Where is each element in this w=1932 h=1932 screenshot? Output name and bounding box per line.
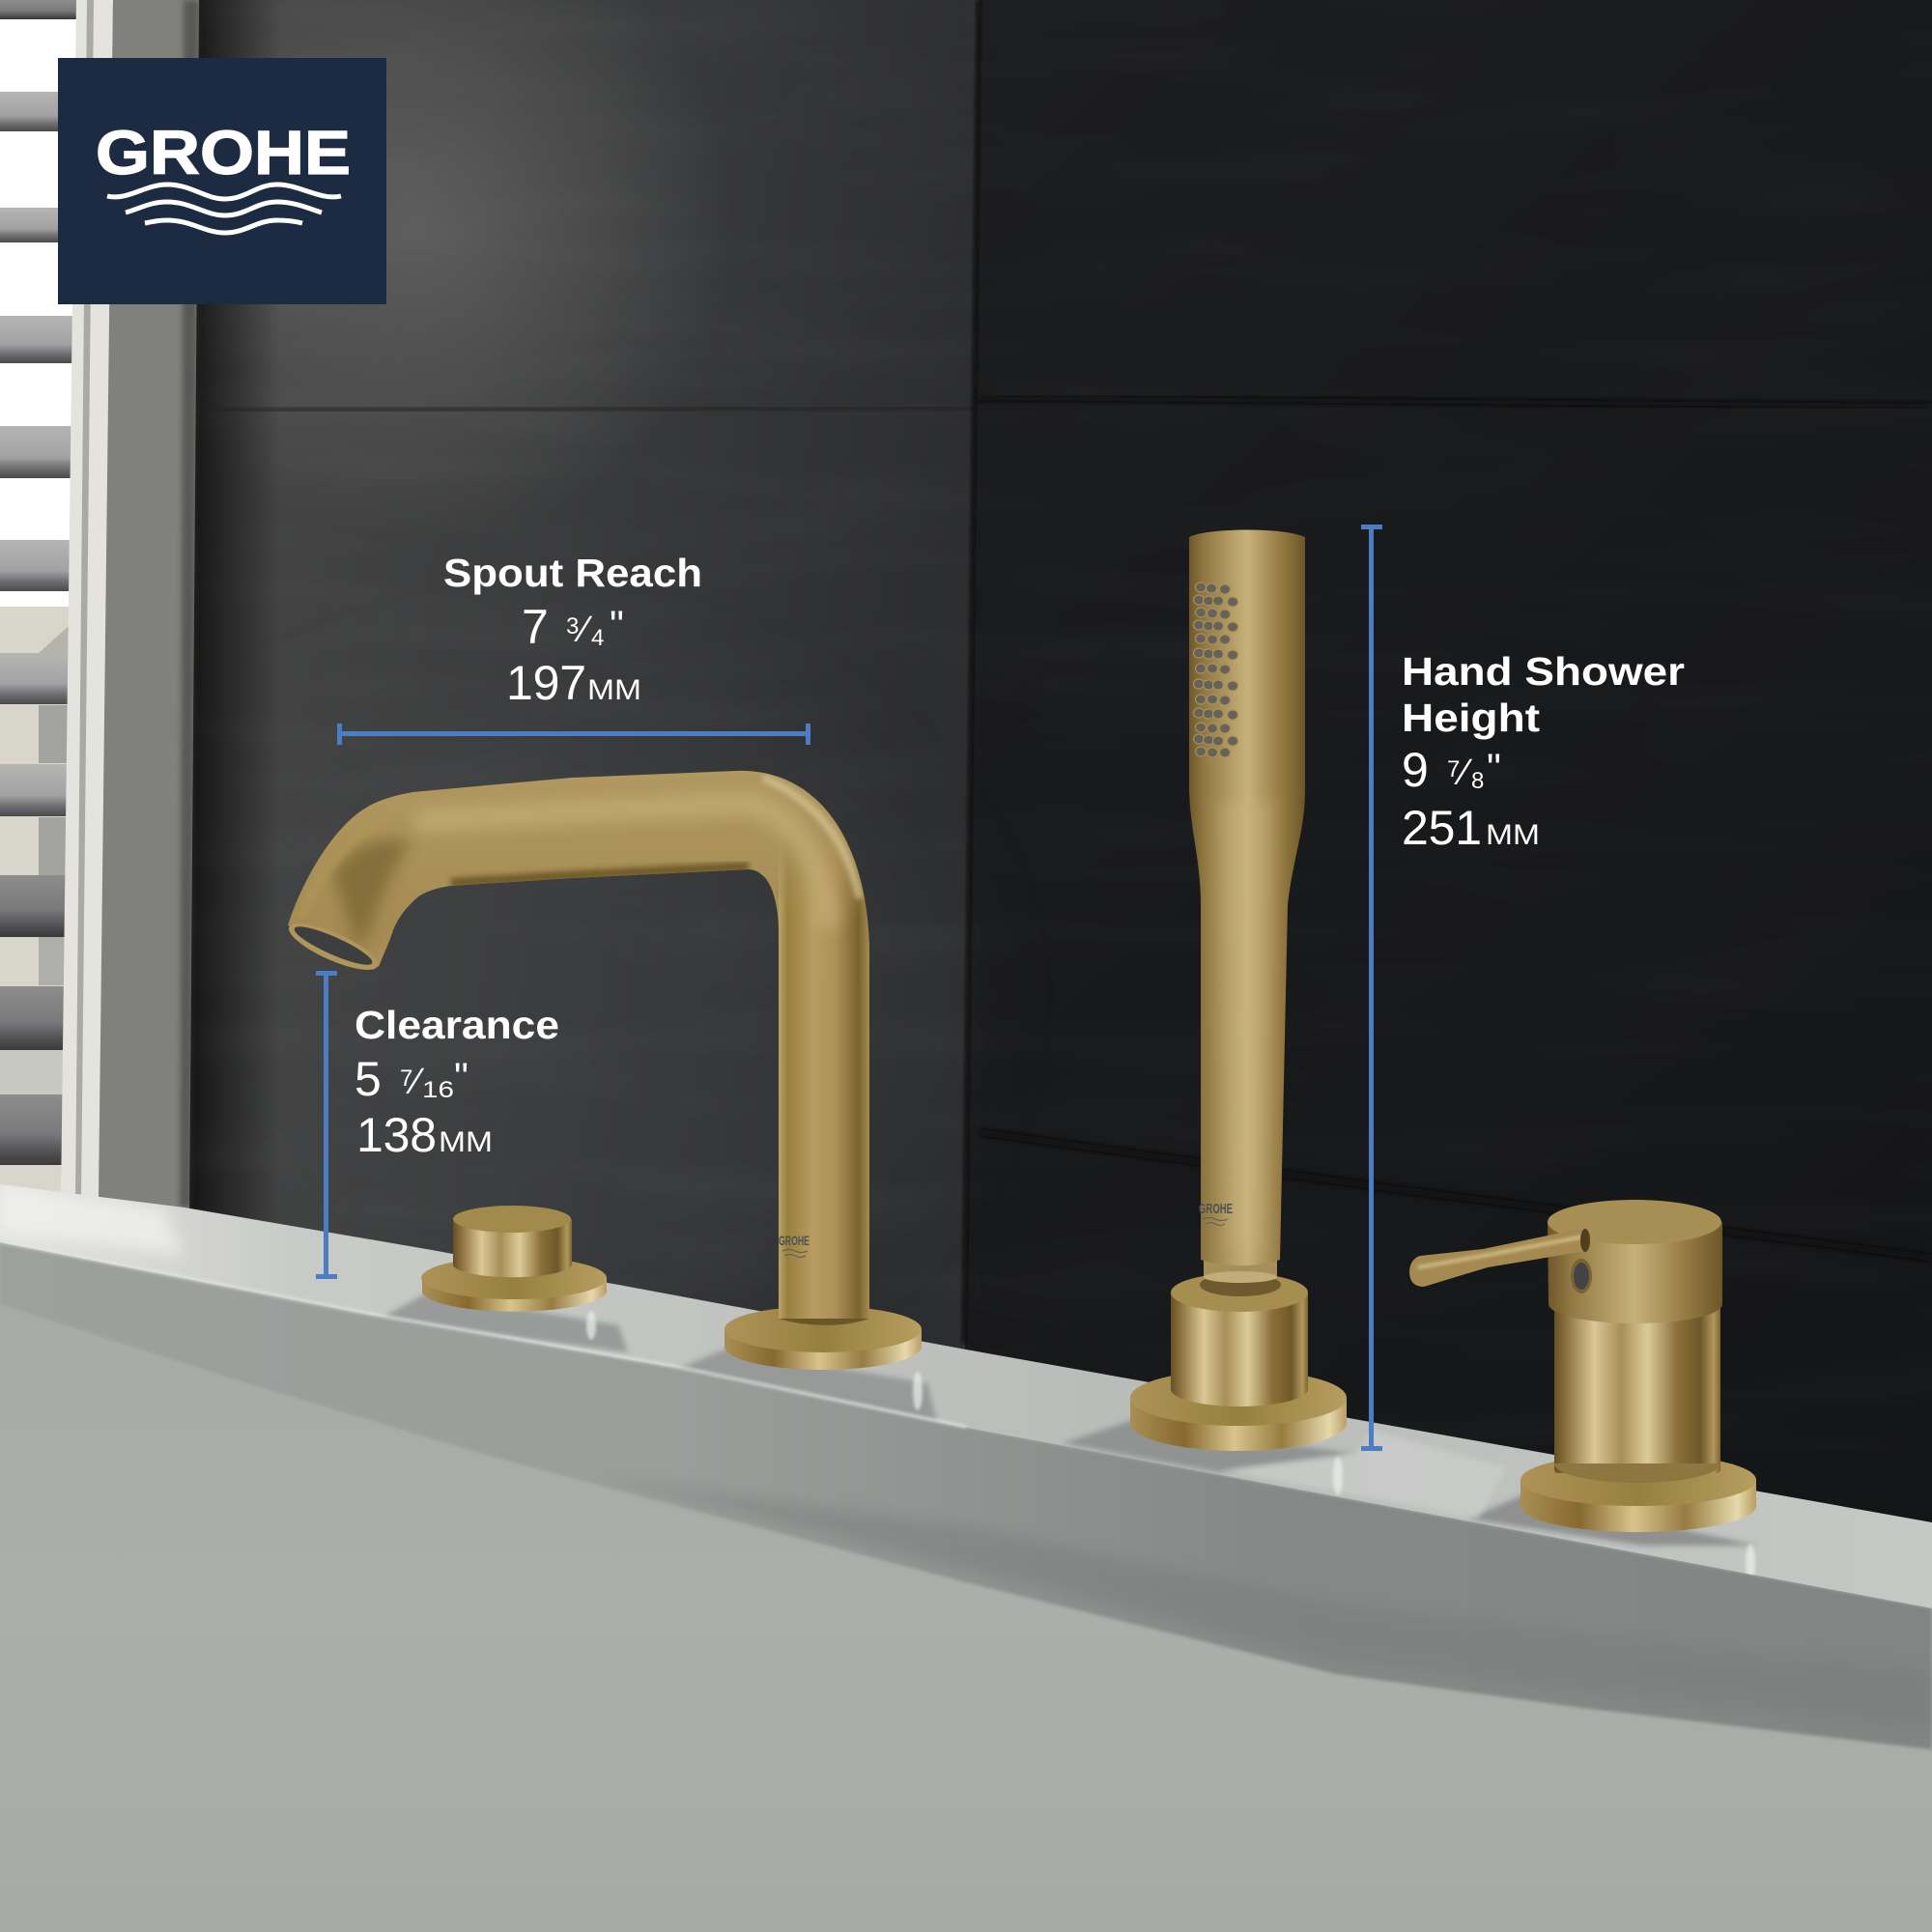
text: hand shower height: 251 [1402,801,1482,855]
panel: dark tiled wall [97,0,1932,1565]
text: spout reach: 4 [591,625,604,651]
text: hand shower height: Height [1402,696,1540,740]
mixer lower cylinder [1554,1304,1720,1473]
GROHE logo panel [58,58,386,304]
panel: window with blinds and frame [0,0,199,1217]
text: clearance: Clearance [355,1003,559,1047]
text: spout reach: ⁄ [574,610,593,650]
mixer screw hole [1571,1259,1592,1293]
spout body [288,771,869,1333]
text: spout reach: " [610,602,624,647]
text: spout reach: Spout Reach [443,551,702,595]
shower holder cylinder [1171,1273,1308,1406]
shadow band under rim [0,1242,1932,1749]
mixer upper cylinder [1548,1200,1722,1323]
panel: bathtub [0,1184,1932,1932]
text: hand shower height: " [1487,745,1501,790]
rim lip line [0,1241,966,1427]
mixer lever [1409,1229,1590,1287]
knurled collar [1200,1256,1281,1296]
aerator opening [284,915,383,979]
logo mark on spout [779,1233,810,1258]
text: hand shower height: Hand Shower [1402,649,1685,694]
faucet spout [284,771,922,1370]
text: spout reach: 197 [506,656,586,710]
knob base disc [421,1257,607,1312]
text: clearance: MM [439,1126,493,1158]
text: spout reach [443,551,702,710]
text: clearance: 16 [422,1077,454,1103]
text: hand shower height: 9 [1402,743,1429,797]
logo mark on spout: GROHE [779,1233,810,1248]
dimension line: hand shower height [1361,525,1382,1451]
mixer base disc [1520,1454,1756,1532]
lever mixer [1409,1200,1756,1532]
shower handle: GROHE [1199,1201,1233,1217]
knob handle [421,1206,607,1312]
text: hand shower height: ⁄ [1454,753,1473,793]
darker lower edge of shadow band [599,1478,1932,1729]
text: spout reach: 3 [566,613,579,639]
text: clearance: 7 [400,1065,412,1092]
tub rim [0,1184,1932,1608]
text: hand shower height [1402,649,1685,855]
shower base disc [1130,1370,1347,1451]
logo waves [107,185,341,233]
dimension line: clearance [316,971,337,1279]
text: spout reach: MM [587,674,641,706]
logo wordmark: GROHE [96,118,351,187]
text: hand shower height: MM [1486,819,1540,851]
text: hand shower height: 8 [1471,768,1484,794]
knob cap [453,1206,572,1277]
text: clearance: " [454,1054,469,1099]
text: clearance: ⁄ [406,1062,425,1102]
text: clearance: 5 [355,1052,382,1106]
text: hand shower height: 7 [1447,756,1460,782]
spray nozzles [1194,582,1238,757]
dimension line: spout reach [337,724,810,745]
shower handle [1189,529,1305,1265]
text: spout reach: 7 [522,600,549,654]
tub interior [0,1242,1932,1932]
rim highlights and faucet shadows [0,1184,1758,1582]
hand shower [1130,529,1347,1451]
text: clearance [355,1003,559,1162]
spout base disc [724,1306,922,1370]
text: clearance: 138 [356,1108,437,1162]
